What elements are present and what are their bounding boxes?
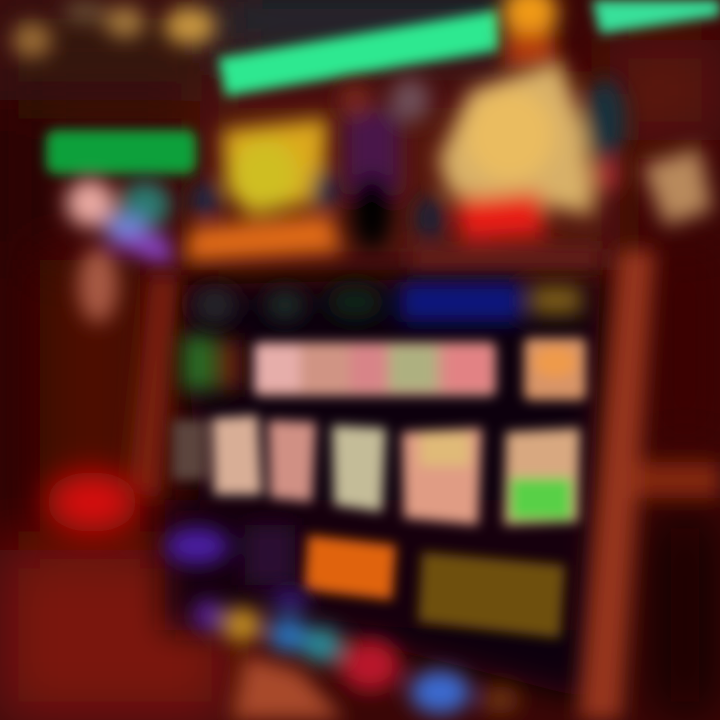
hand at bottom	[232, 655, 345, 720]
green side panel	[182, 336, 242, 390]
wooden side frames	[128, 250, 720, 720]
yellow character figure	[184, 118, 342, 262]
purple button	[165, 525, 295, 585]
right wall plaque	[642, 148, 712, 226]
green neon bands	[218, 0, 720, 96]
upper reel row	[254, 338, 586, 400]
lower reel row	[172, 415, 580, 525]
dark centre figure	[339, 78, 430, 250]
slot machine dark body	[165, 275, 600, 700]
left colourful sign	[66, 179, 172, 323]
red glow on left	[46, 472, 138, 532]
coloured control buttons	[194, 590, 520, 714]
dark yellow panel	[418, 552, 565, 638]
machine top display	[193, 282, 582, 323]
left green sign	[46, 130, 196, 174]
top orange lamp	[502, 0, 558, 68]
orange panel	[304, 535, 396, 600]
top left lights	[12, 2, 216, 58]
cream muscular figure with red base	[410, 60, 625, 268]
